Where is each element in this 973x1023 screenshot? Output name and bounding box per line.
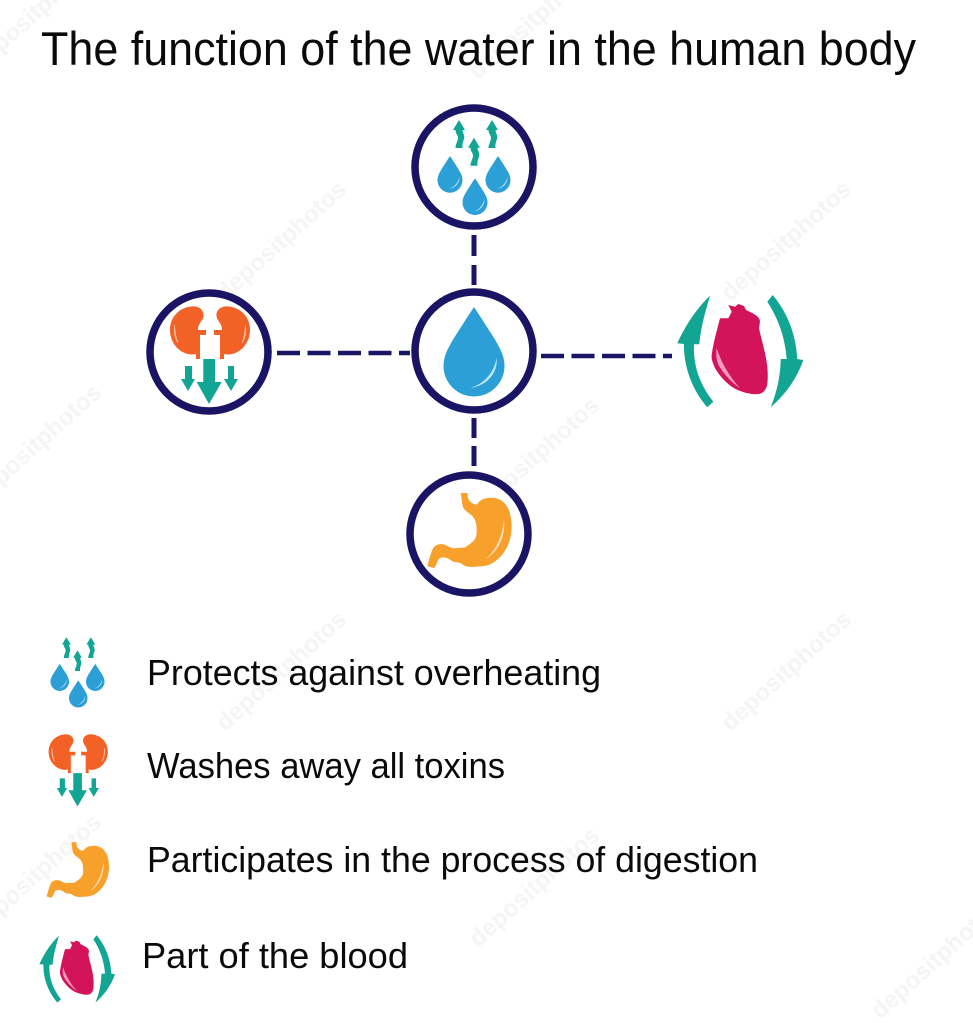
legend icon: stomach (47, 842, 109, 898)
legend item: toxins (49, 734, 505, 806)
connector: center to bottom (472, 418, 476, 467)
connector: center to right (541, 354, 672, 358)
legend text: blood: Part of the blood (142, 935, 408, 976)
legend text: digestion: Participates in the process of digestion (147, 839, 758, 880)
legend icon: sweat drops (50, 637, 105, 708)
legend item: digestion (47, 839, 758, 898)
legend icon: kidneys (49, 734, 108, 806)
icon: kidneys in circle (left) (150, 293, 268, 411)
watermark: depositphotos (716, 606, 857, 736)
title: The function of the water in the human body (41, 22, 916, 75)
watermark: depositphotos (211, 606, 352, 736)
watermark: depositphotos (464, 822, 605, 952)
connector: center to top (472, 235, 476, 285)
legend item: blood (39, 935, 408, 1003)
legend icon: heart (39, 935, 115, 1003)
icon: stomach in circle (bottom) (410, 475, 528, 593)
watermark: depositphotos (464, 392, 605, 522)
watermark: depositphotos (211, 176, 352, 306)
icon: water drop in circle (center) (415, 292, 533, 410)
legend text: toxins: Washes away all toxins (147, 745, 505, 786)
icon: heart with circulation arrows (right) (677, 295, 803, 407)
connector: center to left (277, 351, 410, 355)
legend text: overheating: Protects against overheating (147, 652, 601, 693)
legend item: overheating (50, 637, 601, 708)
watermark: depositphotos (716, 176, 857, 306)
icon: sweat drops in circle (top) (415, 108, 533, 226)
